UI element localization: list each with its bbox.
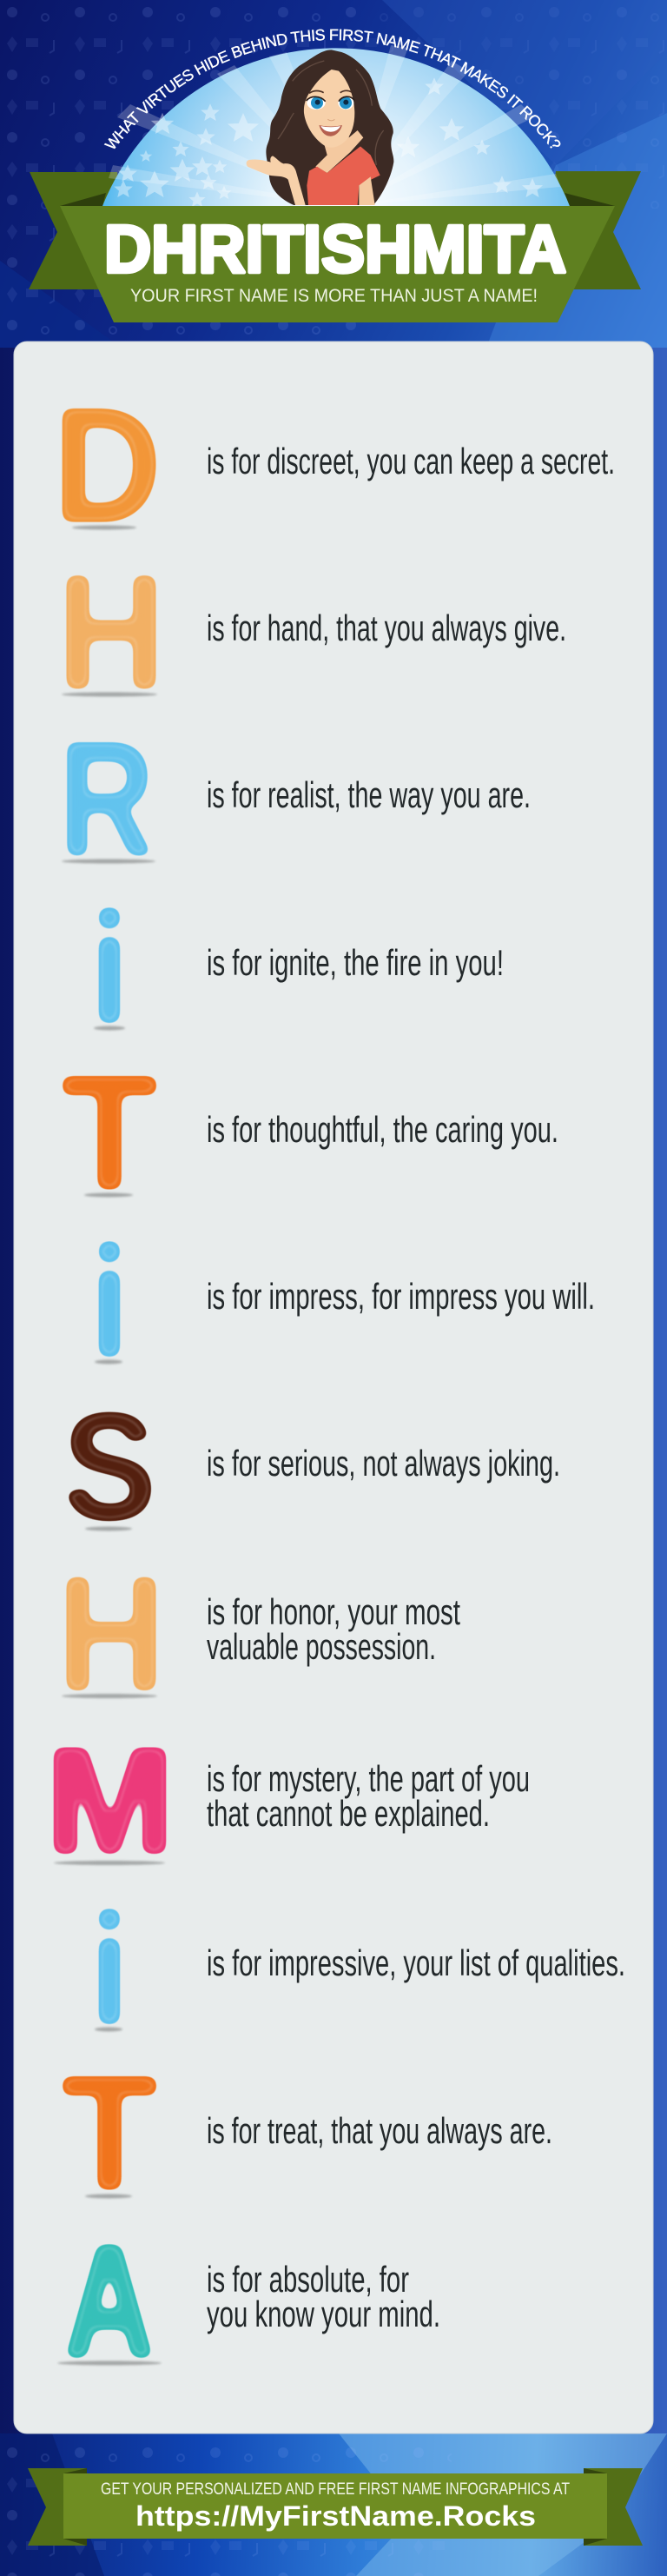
curved tagline: WHAT VIRTUES HIDE BEHIND THIS FIRST NAME THAT MAKES IT ROCK?: [104, 30, 561, 149]
letter R: R: [59, 708, 155, 891]
ribbon back: right tail: [538, 171, 641, 289]
smile: [319, 119, 342, 136]
row: D: [53, 375, 615, 556]
row: R: [59, 708, 531, 891]
text H: [207, 1591, 460, 1667]
letter H: H: [57, 1543, 165, 1725]
footer ribbon folds: [63, 2468, 607, 2546]
main panel: [14, 342, 653, 2433]
letter I: i: [93, 1217, 126, 1387]
sunburst dome with stars: [102, 45, 570, 207]
footer ribbon front: [63, 2473, 607, 2539]
ribbon front: [60, 206, 615, 322]
letter S: S: [63, 1381, 156, 1551]
face: [304, 70, 354, 148]
text H: valuable possession.: [207, 1626, 436, 1667]
footer banner: [28, 2468, 643, 2546]
row: I: [93, 1884, 625, 2055]
ribbon fold shadows: [60, 193, 615, 206]
title: DHRITISHMITA: [104, 212, 566, 287]
text R: is for realist, the way you are.: [207, 774, 531, 815]
row: H: [57, 1543, 460, 1725]
footer call to action: GET YOUR PERSONALIZED AND FREE FIRST NAME INFOGRAPHICS AT: [101, 2480, 570, 2499]
row: I: [93, 883, 504, 1053]
text A: is for absolute, for: [207, 2259, 409, 2300]
letter T: T: [61, 1041, 158, 1225]
footer url: https://MyFirstName.Rocks: [135, 2500, 536, 2532]
arm right: [359, 176, 375, 205]
footer ribbon tail right: [584, 2468, 643, 2546]
letter I: i: [93, 1884, 126, 2055]
letter M: M: [45, 1717, 175, 1884]
subtitle: YOUR FIRST NAME IS MORE THAN JUST A NAME!: [130, 286, 538, 306]
ribbon back: left tail: [29, 172, 130, 289]
character: woman: [247, 50, 393, 205]
arm left and hand: [247, 156, 306, 205]
hair: [266, 50, 393, 205]
letter H: H: [57, 541, 165, 724]
row: A: [57, 2212, 440, 2390]
row: T: [61, 1041, 558, 1225]
text I: is for ignite, the fire in you!: [207, 942, 504, 983]
text H: is for honor, your most: [207, 1591, 460, 1632]
row: M: [45, 1717, 530, 1884]
letter I: i: [93, 883, 126, 1053]
neck and chest: [315, 128, 363, 173]
header: [29, 30, 641, 322]
text M: is for mystery, the part of you: [207, 1758, 530, 1799]
shirt: [307, 146, 380, 205]
text M: [207, 1758, 530, 1834]
text A: [207, 2259, 440, 2334]
row: H: [57, 541, 566, 724]
row: I: [93, 1217, 595, 1387]
row: S: [63, 1381, 560, 1551]
letter D: D: [53, 375, 162, 556]
text A: you know your mind.: [207, 2294, 440, 2334]
letter A: A: [64, 2212, 155, 2390]
row: T: [61, 2042, 552, 2225]
text M: that cannot be explained.: [207, 1793, 490, 1834]
footer ribbon tail left: [28, 2468, 87, 2546]
eyes: [307, 90, 354, 110]
letter T: T: [61, 2042, 158, 2225]
